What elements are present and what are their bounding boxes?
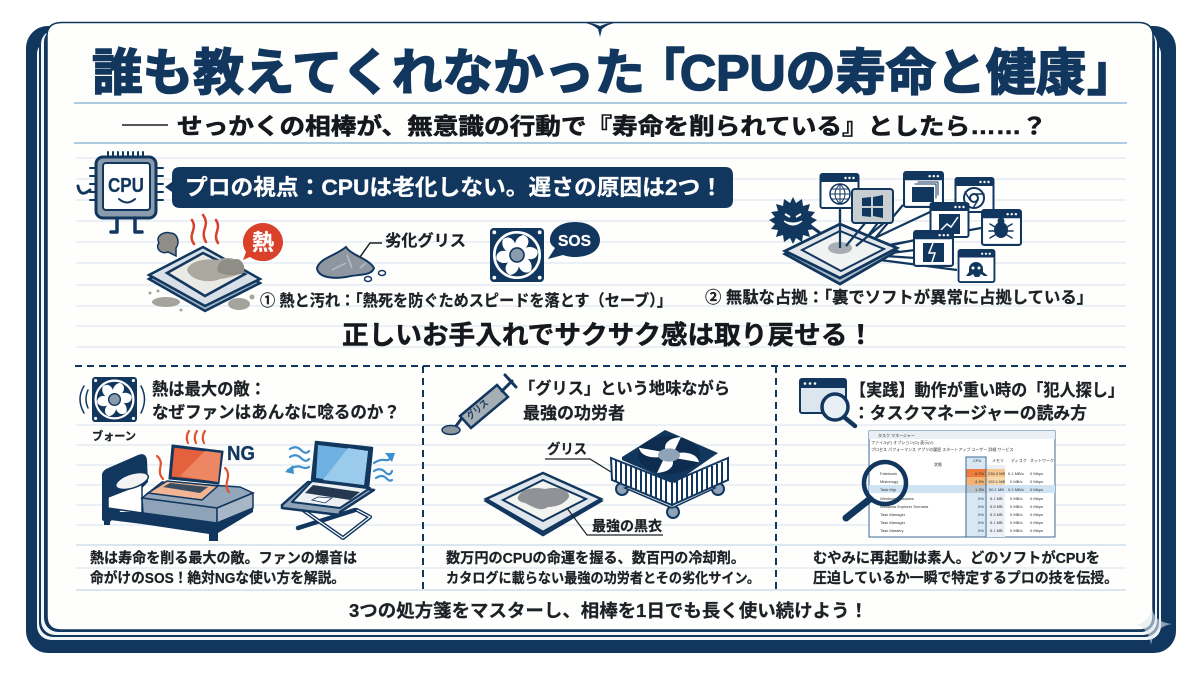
text: task manager panel description: むやみに再起動は素人。どのソフトがCPUを — [813, 549, 1100, 567]
heading: task manager panel: ：タスクマネージャーの読み方 — [853, 403, 1087, 423]
illustration: task manager screenshot: 0 MB/s — [1010, 520, 1022, 525]
illustration: task manager screenshot: 0.1 MB/s — [1008, 487, 1024, 492]
illustration: task manager screenshot: 0 Mbps — [1030, 504, 1043, 509]
icon: SOS speech bubble — [548, 222, 600, 259]
illustration: laptop on bed — [102, 431, 253, 541]
icon: grease syringe: グリス — [464, 397, 491, 422]
illustration: task manager screenshot: タスク マネージャー — [878, 432, 915, 438]
title: 」 — [1087, 45, 1137, 101]
illustration: task manager screenshot: 192.1 MB — [988, 479, 1005, 484]
icon: virus — [769, 197, 817, 244]
illustration: task manager screenshot: Task Mgr — [880, 487, 897, 492]
illustration: task manager screenshot: 0 MB/s — [1010, 496, 1022, 501]
panel: two causes — [78, 152, 1093, 312]
heading: heat panel — [152, 380, 400, 422]
illustration: task manager screenshot: Fatelowin — [880, 471, 897, 476]
illustration: task manager screenshot: Task Manager — [880, 520, 906, 525]
ruled notebook lines — [74, 103, 1127, 590]
label: NG: NG — [227, 443, 255, 465]
illustration: task manager screenshot: 0 Mbps — [1030, 471, 1043, 476]
illustration: task manager screenshot: 0 Mbps — [1030, 487, 1043, 492]
icon: grease syringe — [442, 375, 516, 434]
illustration: task manager screenshot: 5.1 MB — [990, 520, 1003, 525]
illustration: task manager screenshot: 1.3% — [975, 487, 985, 492]
heading: grease panel — [519, 378, 730, 423]
illustration: task manager screenshot: 4.3% — [975, 479, 985, 484]
icon: CPU occupied by background apps — [769, 172, 1021, 284]
icon: app window — [914, 231, 953, 266]
label: black-clad hero with leader: 最強の黒衣 — [592, 518, 662, 534]
text: heat panel description: 熱は寿命を削る最大の敵。ファンの爆音は — [90, 549, 357, 567]
illustration: task manager screenshot: 5.3 MB — [990, 512, 1003, 517]
callout: pro viewpoint banner: プロの視点：CPUは老化しない。遅さの原因は2つ！ — [185, 175, 723, 200]
illustration: CPU with grease — [486, 473, 601, 535]
icon: large magnifier — [846, 462, 906, 518]
title: CPUの寿命と健康 — [680, 45, 1086, 101]
illustration: task manager screenshot: 236.3 MB — [988, 471, 1005, 476]
illustration: task manager screenshot: CPU — [973, 458, 982, 463]
illustration: task manager screenshot: 0% — [978, 504, 984, 509]
icon: roaring fan — [80, 377, 144, 422]
icon: bug window — [982, 210, 1021, 245]
illustration: task manager screenshot: ディスク — [1011, 457, 1027, 463]
illustration: task manager screenshot: 0 MB/s — [1010, 504, 1022, 509]
illustration: task manager screenshot: Task Mastery — [880, 528, 904, 533]
label: grease with leader — [545, 441, 611, 472]
icon: chart window — [930, 203, 968, 237]
icon: fan — [490, 228, 544, 282]
text: task manager panel description: 圧迫しているか一瞬で特定するプロの技を伝授。 — [813, 570, 1118, 587]
illustration: CPU cooler — [611, 430, 728, 518]
illustration: task manager screenshot: Windows Shadows — [880, 496, 914, 501]
heading: care restores speed: 正しいお手入れでサクサク感は取り戻せる！ — [342, 320, 874, 350]
dashed panel dividers — [75, 366, 1127, 592]
title — [92, 45, 1137, 101]
text: heat panel description — [90, 549, 357, 587]
illustration: task manager screenshot: メモリ — [992, 458, 1004, 463]
icon: SOS speech bubble: SOS — [558, 233, 591, 250]
heading: heat panel: 熱は最大の敵： — [152, 380, 266, 399]
label: degraded grease: 劣化グリス — [385, 231, 466, 250]
heading: heat panel: なぜファンはあんなに唸るのか？ — [152, 403, 400, 422]
icon: sparkle — [1136, 608, 1172, 645]
illustration: task manager screenshot: 6.7% — [975, 471, 985, 476]
icon: windows logo window — [852, 189, 893, 223]
illustration: task manager screenshot: 0% — [978, 496, 984, 501]
illustration: task manager screenshot: 0 Mbps — [1030, 512, 1043, 517]
illustration: task manager screenshot: 5.1 MB — [990, 528, 1003, 533]
text: task manager panel description — [813, 549, 1118, 587]
text: grease panel description — [446, 549, 760, 586]
icon: degraded grease pile — [317, 243, 386, 282]
label: grease with leader: グリス — [547, 441, 587, 457]
icon: heat speech bubble: 熱 — [252, 230, 274, 255]
subtitle: せっかくの相棒が、無意識の行動で『寿命を削られている』としたら……？ — [177, 113, 1047, 139]
illustration: task manager screenshot: 0 Mbps — [1030, 496, 1043, 501]
text: grease panel description: 数万円のCPUの命運を握る、数百円の冷却剤。 — [446, 549, 745, 567]
text: cause one: ① 熱と汚れ：「熱死を防ぐためスピードを落とす（セーブ）」 — [260, 291, 672, 310]
illustration: task manager screenshot: 0.1 MB/s — [1008, 471, 1024, 476]
icon: window with magnifier — [800, 379, 855, 426]
icon: globe window — [820, 174, 858, 208]
icon: browser window — [956, 178, 994, 212]
illustration: task manager screenshot: ネットワーク — [1030, 457, 1054, 463]
icon: CPU mascot — [78, 152, 163, 232]
heading: grease panel: 「グリス」という地味ながら — [519, 378, 730, 398]
illustration: task manager screenshot: 0 MB/s — [1010, 479, 1022, 484]
label: black-clad hero with leader — [567, 508, 663, 535]
illustration: laptop on ventilated stand — [282, 442, 395, 538]
text: grease panel description: カタログに載らない最強の功労者とその劣化サイン。 — [446, 570, 760, 586]
icon: heat speech bubble — [243, 223, 283, 261]
panel: heat is the enemy — [80, 377, 400, 587]
illustration: task manager screenshot: 0 Mbps — [1030, 520, 1043, 525]
heading: task manager panel: 【実践】動作が重い時の「犯人探し」 — [850, 380, 1124, 400]
illustration: task manager screenshot: Windows Explorer Somaria — [880, 504, 929, 509]
heading: grease panel: 最強の功労者 — [523, 404, 625, 423]
icon: dusty overheating CPU — [148, 215, 260, 312]
illustration: task manager screenshot: 0 Mbps — [1030, 479, 1043, 484]
illustration: task manager screenshot: 0 Mbps — [1030, 528, 1043, 533]
illustration: task manager screenshot: Task Manager — [880, 512, 906, 517]
illustration: task manager screenshot: 50.1 MB — [989, 487, 1004, 492]
icon: octopus window — [959, 250, 994, 282]
illustration: task manager screenshot: Mistonogy — [880, 479, 898, 484]
illustration: task manager screenshot — [869, 431, 1055, 537]
illustration: task manager screenshot: 0 MB/s — [1010, 528, 1022, 533]
heading: task manager panel — [850, 380, 1124, 423]
title: 「 — [635, 45, 685, 101]
illustration: task manager screenshot: プロセス パフォーマンス アプリの履歴 スタートアップ ユーザー 詳細 サービス — [871, 446, 1014, 452]
callout: pro viewpoint banner — [165, 167, 733, 208]
illustration: task manager screenshot: 0% — [978, 512, 984, 517]
illustration: task manager screenshot: 5.5 MB — [990, 504, 1003, 509]
panel: task manager — [800, 379, 1124, 587]
label: fan sound: ブォーン — [92, 429, 136, 443]
illustration: task manager screenshot: 6.1 MB — [990, 496, 1003, 501]
footer message: 3つの処方箋をマスターし、相棒を1日でも長く使い続けよう！ — [349, 600, 868, 621]
illustration: task manager screenshot: 状態 — [934, 461, 942, 467]
text: heat panel description: 命がけのSOS！絶対NGな使い方を解説。 — [90, 569, 345, 587]
icon: stacked pages window — [904, 172, 943, 207]
illustration: task manager screenshot: 0% — [978, 520, 984, 525]
illustration: task manager screenshot: 0% — [978, 528, 984, 533]
text: cause two: ② 無駄な占拠：「裏でソフトが異常に占拠している」 — [705, 287, 1093, 307]
illustration: task manager screenshot: ファイル(F) オプション(O) 表示(V) — [871, 439, 934, 445]
illustration: task manager screenshot: 0 MB/s — [1010, 512, 1022, 517]
title: 誰も教えてくれなかった — [92, 45, 645, 101]
panel: grease — [442, 375, 760, 586]
icon: CPU mascot: CPU — [108, 175, 144, 197]
